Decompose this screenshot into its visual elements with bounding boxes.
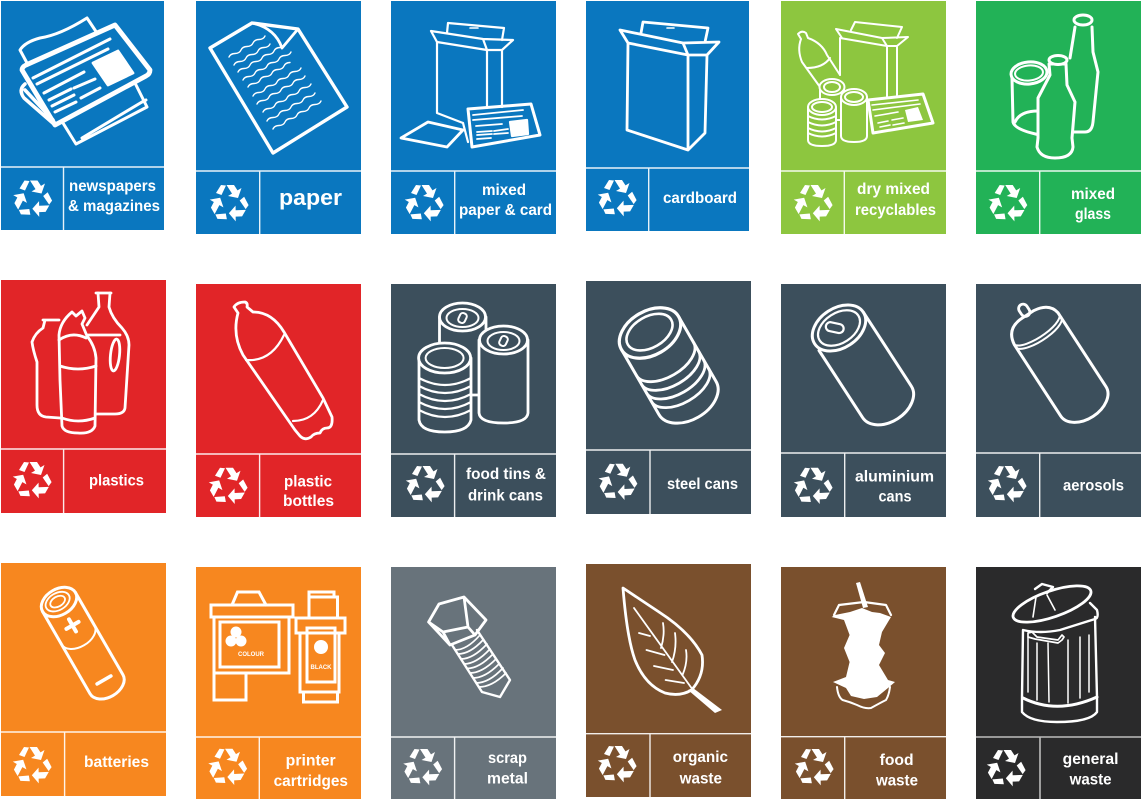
label: paper [279,185,342,210]
icon: recycling symbol [792,749,836,787]
label: & magazines [68,198,160,215]
icon: recycling symbol [10,462,54,500]
icon: bolt [429,597,510,697]
icon: printer cartridges: COLOUR [238,652,265,658]
label [68,178,160,215]
icon: plastic bottles [32,293,129,433]
icon: newspapers [20,18,150,144]
icon: recycling symbol [985,466,1029,504]
panel: food waste [781,567,946,799]
icon: recycling symbol [11,180,55,219]
panel: dry mixed recyclables [781,1,946,234]
panel: plastic bottles [196,284,361,517]
label: scrap [488,750,527,767]
label: waste [1069,771,1112,788]
label: batteries [84,754,149,771]
panel: steel cans [586,281,751,514]
label: plastic [284,474,332,491]
label [274,753,348,790]
label [459,182,552,219]
panel: aluminium cans [781,284,946,517]
panel: mixed paper & card [391,1,556,234]
label: waste [679,771,722,788]
panel: aerosols [976,284,1141,517]
icon: glass bottles and jar [1010,15,1098,158]
label [1063,751,1118,788]
icon: plastic bottle [234,302,332,439]
label: drink cans [468,488,543,505]
label: food [880,752,914,769]
icon: mixed recyclables [798,22,933,146]
icon: recycling symbol [984,750,1028,788]
icon: recycling symbol [207,185,251,223]
icon: printer cartridges: BLACK [310,665,332,671]
label: cartridges [274,773,348,790]
icon: recycling symbol [595,746,639,784]
label: bottles [283,493,334,510]
label: recyclables [855,202,936,219]
label: organic [673,749,728,766]
icon: leaf [623,588,722,713]
icon: recycling symbol [791,468,835,506]
icon: recycling symbol [595,180,639,218]
icon: steel can [610,297,727,434]
panel: general waste [976,567,1141,799]
panel: newspapers & magazines [1,1,164,230]
label: newspapers [69,178,156,195]
icon: cardboard box [620,22,719,150]
label: cans [878,489,912,506]
icon: recycling symbol [10,747,54,785]
panel: mixed glass [976,1,1141,234]
icon: recycling symbol [402,185,446,223]
icon: recycling symbol [206,749,250,787]
label [855,181,936,219]
label [1071,186,1115,223]
panel: batteries [1,563,166,796]
panel: plastics [1,280,166,513]
label [466,466,546,505]
label: cardboard [663,190,737,207]
label: aerosols [1063,478,1124,495]
panel: food tins & drink cans [391,284,556,517]
panel: printer cartridges [196,567,361,799]
label: steel cans [667,476,738,493]
icon: apple core [832,582,895,708]
label: aluminium [855,469,934,486]
label: mixed [482,182,526,199]
icon: aerosol can [998,290,1116,431]
icon: printer cartridges [211,592,345,702]
label [487,750,528,788]
label: general [1063,751,1118,768]
icon: rubbish bin [1009,578,1098,722]
label: waste [875,773,918,790]
label [673,749,728,788]
label: food tins & [466,466,546,483]
icon: box, tray and newspaper [401,23,540,147]
label: plastics [89,473,144,490]
icon: recycling symbol [401,749,445,787]
panel: organic waste [586,564,751,797]
label: mixed [1071,186,1115,203]
panel: paper [196,1,361,234]
icon: recycling symbol [791,185,835,223]
label: metal [487,771,528,788]
icon: aluminium can [804,295,922,434]
icon: recycling symbol [206,468,250,506]
label [283,474,334,510]
icon: recycling symbol [403,466,447,504]
panel: scrap metal [391,567,556,799]
panel: cardboard [586,1,749,231]
label: printer [286,753,336,770]
label: dry mixed [857,181,930,198]
icon: sheet of paper [210,23,347,153]
label [855,469,934,506]
icon: recycling symbol [986,185,1030,223]
icon: recycling symbol [596,464,640,502]
label: glass [1075,206,1111,223]
label [875,752,918,790]
label: paper & card [459,202,552,219]
icon: cans and tin [419,303,528,432]
icon: battery [36,581,129,705]
